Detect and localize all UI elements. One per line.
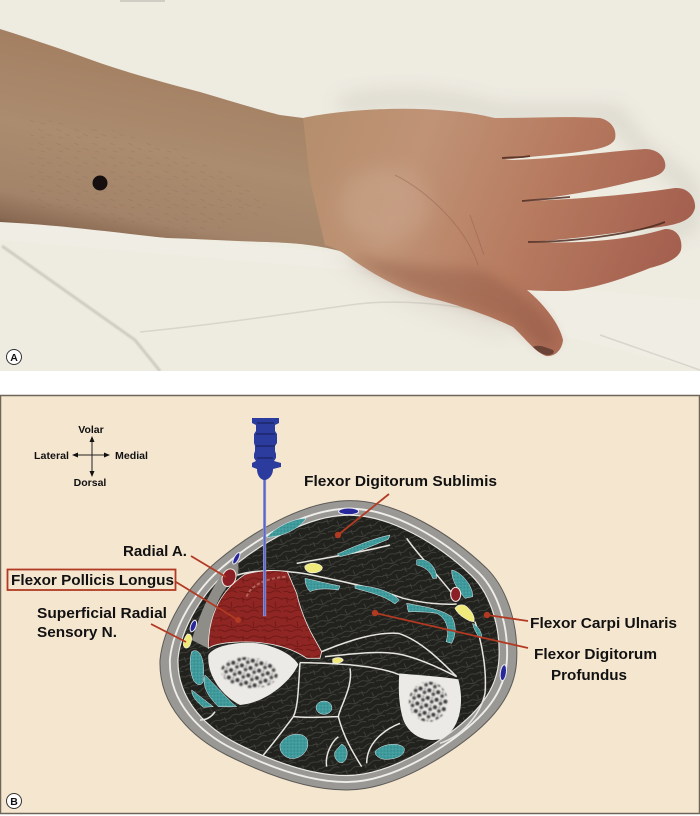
panel letter A <box>6 350 22 364</box>
label: Superficial Radial Sensory N.: Sensory N. <box>37 625 117 641</box>
grey area beside superficial branch <box>192 553 238 648</box>
arteries <box>220 567 461 601</box>
leader lines <box>151 494 528 648</box>
panel letter B <box>6 794 22 808</box>
ulna bone <box>399 673 461 740</box>
flexor pollicis longus muscle <box>208 571 322 658</box>
nerves (yellow) <box>183 563 474 663</box>
label: Flexor Digitorum Sublimis: Flexor Digitorum Sublimis <box>304 474 497 490</box>
panel letter A: A <box>10 352 18 364</box>
label box: Flexor Pollicis Longus: Flexor Pollicis Longus <box>11 573 174 589</box>
bed sheet <box>0 0 700 371</box>
forearm <box>0 29 347 253</box>
skin and fascia ring <box>160 501 517 790</box>
label: Flexor Digitorum Profundus <box>534 647 657 684</box>
radius bone <box>208 643 298 705</box>
orientation compass: Medial <box>115 450 148 462</box>
orientation compass: Dorsal <box>74 477 106 489</box>
injection site marker <box>92 176 108 190</box>
orientation compass <box>34 424 148 489</box>
deep compartment muscle mass <box>178 515 499 776</box>
septa <box>200 538 485 767</box>
panel A: photograph of forearm and hand <box>0 0 700 371</box>
label: Superficial Radial Sensory N.: Superficial Radial <box>37 606 167 622</box>
veins <box>189 508 507 681</box>
label: Flexor Carpi Ulnaris: Flexor Carpi Ulnaris <box>530 616 677 632</box>
label: Flexor Digitorum Profundus: Flexor Digitorum <box>534 647 657 663</box>
panel B: cross-section diagram background <box>0 396 700 814</box>
label: Flexor Digitorum Profundus: Profundus <box>551 668 627 684</box>
label: Superficial Radial Sensory N. <box>37 606 167 641</box>
label: Radial A.: Radial A. <box>123 544 187 560</box>
needle electrode <box>252 418 281 616</box>
orientation compass: Lateral <box>34 450 69 462</box>
orientation compass: Volar <box>78 424 104 436</box>
teal tendons <box>190 518 482 763</box>
forearm cross-section <box>160 501 517 790</box>
palm highlight and creases <box>344 171 426 238</box>
hand <box>303 109 695 356</box>
panel letter B: B <box>10 796 18 808</box>
